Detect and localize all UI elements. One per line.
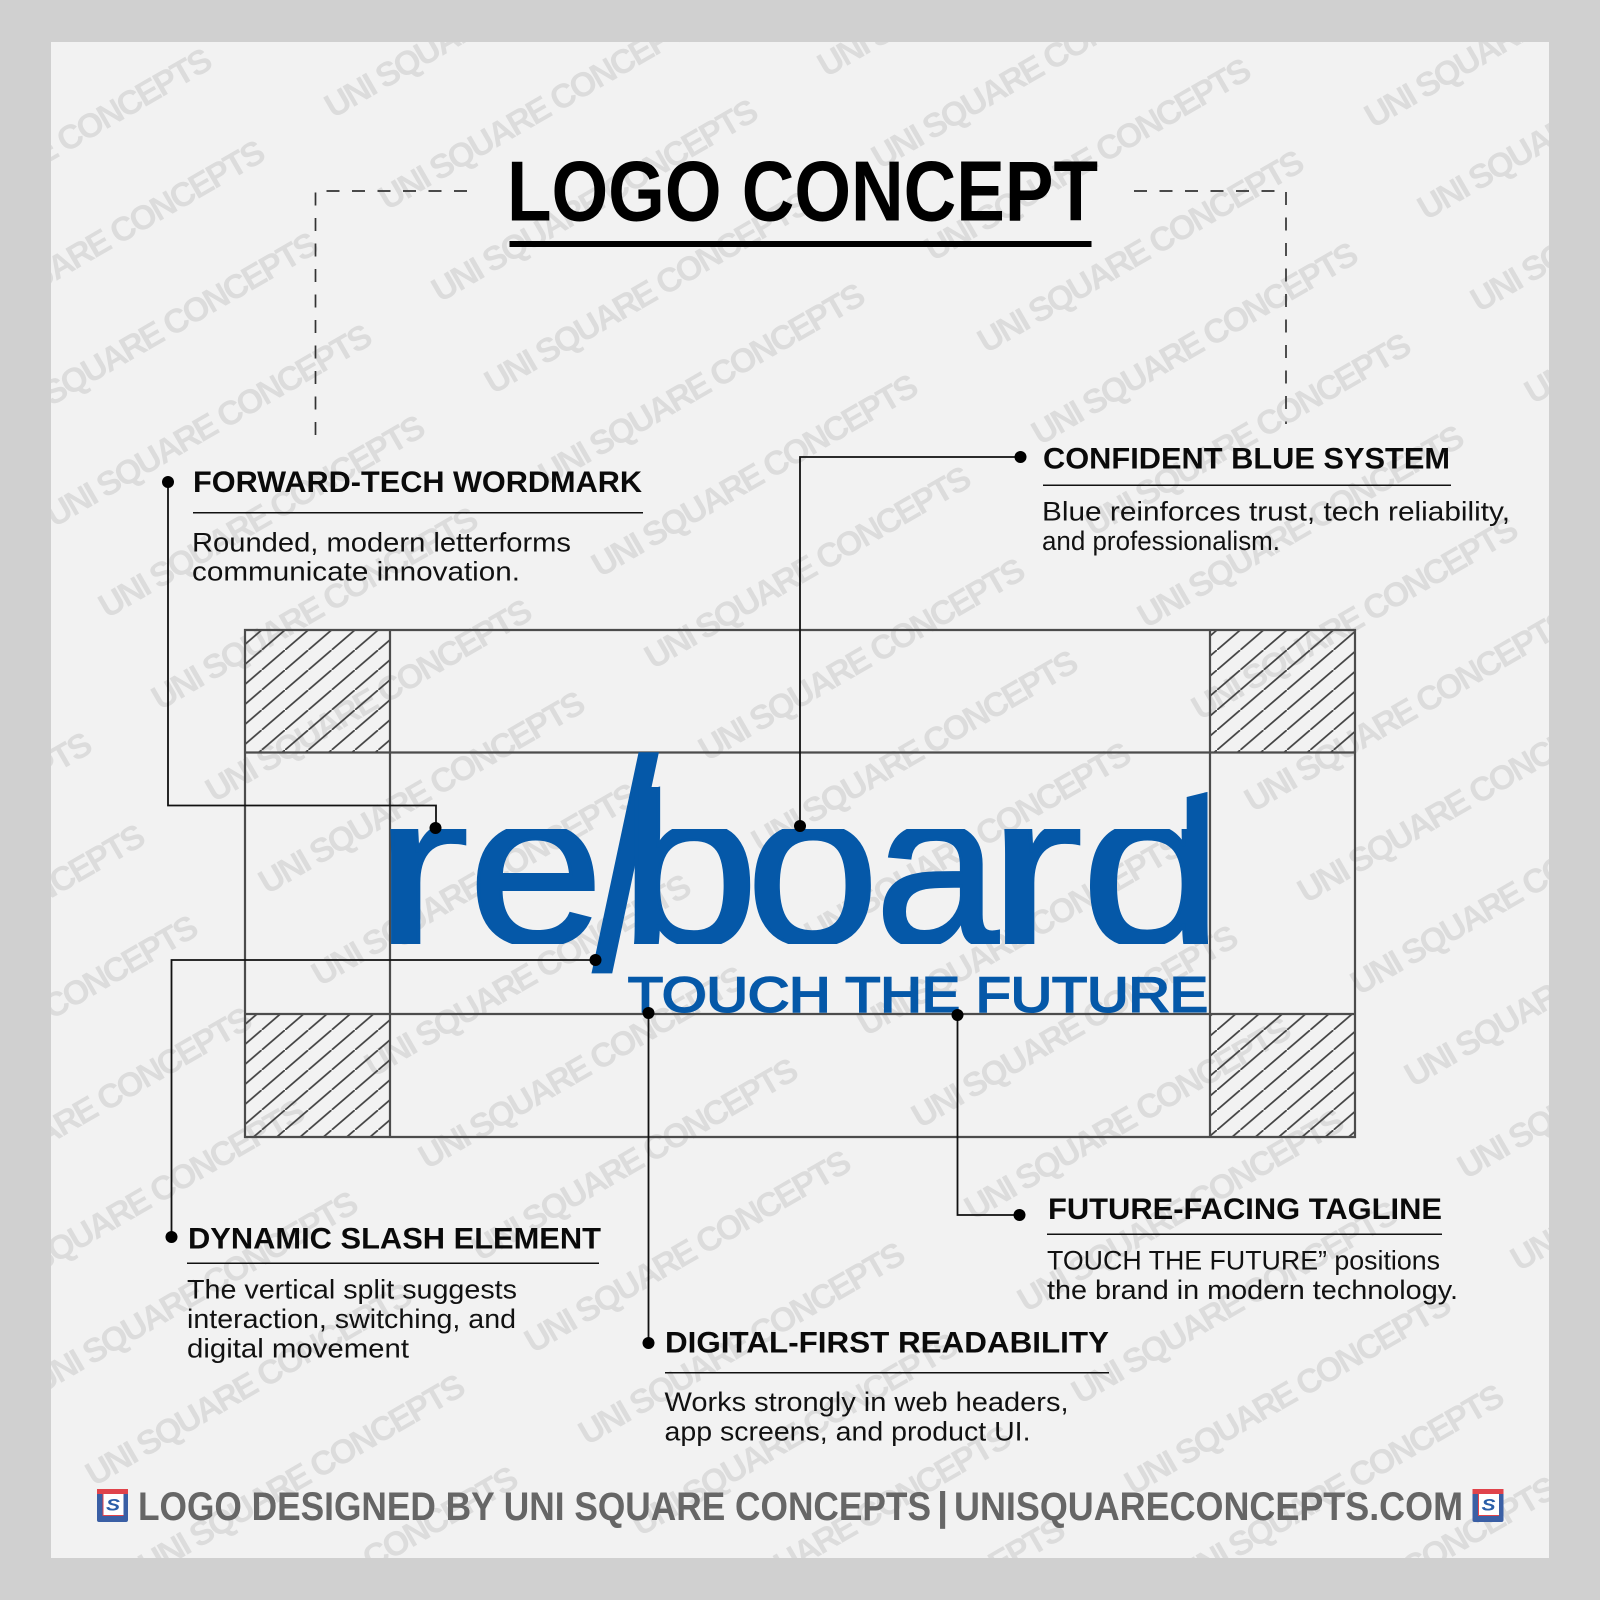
watermark pattern: UNI SQUARE CONCEPTS bbox=[1025, 235, 1364, 453]
heading: CONFIDENT BLUE SYSTEM bbox=[1043, 442, 1450, 476]
watermark pattern: UNI SQUARE CONCEPTS bbox=[425, 92, 764, 310]
logo: re/board wordmark: r bbox=[987, 743, 1083, 991]
watermark pattern: UNI SQUARE CONCEPTS bbox=[1238, 602, 1577, 820]
icon: footer logo left bbox=[97, 1489, 128, 1522]
watermark pattern: UNI SQUARE CONCEPTS bbox=[145, 500, 484, 718]
connector bbox=[166, 954, 602, 1243]
watermark pattern: UNI SQUARE CONCEPTS bbox=[79, 1276, 418, 1494]
logo: re/board wordmark: b bbox=[620, 744, 759, 992]
watermark pattern: UNI SQUARE CONCEPTS bbox=[39, 317, 378, 535]
watermark pattern: UNI SQUARE CONCEPTS bbox=[465, 1051, 804, 1269]
watermark pattern: UNI SQUARE CONCEPTS bbox=[25, 1184, 364, 1402]
watermark pattern: UNI SQUARE CONCEPTS bbox=[1011, 1102, 1350, 1320]
watermark pattern: UNI SQUARE CONCEPTS bbox=[92, 408, 431, 626]
watermark pattern: UNI SQUARE CONCEPTS bbox=[1065, 1194, 1404, 1412]
icon: footer logo left: S bbox=[106, 1496, 121, 1514]
body text: and professionalism. bbox=[1042, 526, 1280, 556]
watermark pattern: UNI SQUARE CONCEPTS bbox=[798, 735, 1137, 953]
watermark pattern: UNI SQUARE CONCEPTS bbox=[905, 918, 1244, 1136]
connector bbox=[642, 1007, 654, 1349]
watermark pattern: UNI SQUARE CONCEPTS bbox=[532, 276, 871, 494]
heading: FUTURE-FACING TAGLINE bbox=[1048, 1193, 1442, 1226]
callout: future-facing tagline bbox=[952, 1009, 1458, 1305]
logo tagline: TOUCH THE FUTURE bbox=[628, 968, 1208, 1022]
callout: forward-tech wordmark bbox=[162, 466, 643, 834]
heading: FORWARD-TECH WORDMARK bbox=[193, 466, 642, 499]
watermark pattern: UNI SQUARE CONCEPTS bbox=[958, 1010, 1297, 1228]
rule bbox=[665, 1372, 1109, 1374]
body text bbox=[664, 1387, 1068, 1446]
watermark pattern: UNI SQUARE CONCEPTS bbox=[252, 684, 591, 902]
clear-space grid bbox=[245, 630, 1355, 1137]
body text: Rounded, modern letterforms bbox=[192, 528, 571, 558]
watermark pattern: UNI SQUARE CONCEPTS bbox=[478, 184, 817, 402]
connector bbox=[794, 451, 1026, 832]
watermark pattern: UNI SQUARE CONCEPTS bbox=[518, 1143, 857, 1361]
watermark pattern: UNI SQUARE CONCEPTS bbox=[1171, 1377, 1510, 1595]
watermark pattern: CONCEPTS bbox=[356, 1459, 524, 1578]
body text bbox=[192, 528, 571, 586]
watermark pattern: UNI SQUARE CONCEPTS bbox=[372, 0, 711, 218]
body text bbox=[187, 1274, 517, 1364]
rule bbox=[1043, 484, 1451, 486]
body text: app screens, and product UI. bbox=[664, 1416, 1030, 1446]
dashed bracket right bbox=[1134, 191, 1286, 424]
heading: DYNAMIC SLASH ELEMENT bbox=[188, 1222, 601, 1256]
watermark pattern: UNI SQUARE CONCEPTS bbox=[918, 51, 1257, 269]
watermark pattern: UNI SQUARE CONCEPTS bbox=[1118, 1285, 1457, 1503]
footer credit bbox=[138, 1485, 1463, 1529]
connector bbox=[162, 476, 442, 834]
body text: Blue reinforces trust, tech reliability, bbox=[1042, 496, 1510, 526]
logo: re/board wordmark: e bbox=[468, 744, 604, 992]
watermark pattern: UNI SQUARE CONCEPTS bbox=[412, 959, 751, 1177]
logo: re/board wordmark bbox=[373, 701, 1223, 1033]
icon: footer logo right: S bbox=[1482, 1496, 1496, 1514]
watermark pattern: UNI SQUARE CONCEPTS bbox=[305, 776, 644, 994]
rule bbox=[187, 1262, 599, 1264]
callout: digital-first readability bbox=[642, 1007, 1109, 1446]
body text: communicate innovation. bbox=[192, 556, 520, 586]
watermark pattern: UNI SQUARE CONCEPTS bbox=[1131, 418, 1470, 636]
title: LOGO CONCEPT bbox=[507, 144, 1098, 240]
watermark pattern: UNI SQUARE CONCEPTS bbox=[971, 143, 1310, 361]
heading: DIGITAL-FIRST READABILITY bbox=[665, 1326, 1109, 1360]
body text: The vertical split suggests bbox=[187, 1274, 517, 1304]
logo: re/board wordmark: o bbox=[746, 743, 879, 991]
watermark pattern: UARE CONCEPTS bbox=[768, 1418, 1017, 1584]
rule bbox=[1047, 1234, 1442, 1235]
footer credit: | bbox=[937, 1485, 948, 1529]
icon: footer logo right bbox=[1472, 1489, 1504, 1522]
watermark pattern: UNI SQUARE CONCEPTS bbox=[199, 592, 538, 810]
footer credit: UNISQUARECONCEPTS.COM bbox=[954, 1485, 1463, 1529]
logo: re/board wordmark: r bbox=[373, 743, 469, 991]
watermark pattern: UNI SQUARE CONCEPTS bbox=[572, 1235, 911, 1453]
body text: Works strongly in web headers, bbox=[664, 1387, 1068, 1417]
footer credit: LOGO DESIGNED BY UNI SQUARE CONCEPTS bbox=[138, 1485, 931, 1529]
dashed bracket left bbox=[316, 191, 467, 437]
callout: confident blue system bbox=[794, 442, 1510, 832]
connector bbox=[952, 1009, 1026, 1221]
watermark pattern: UNI SQUARE CONCEPTS bbox=[358, 867, 697, 1085]
body text: the brand in modern technology. bbox=[1047, 1275, 1458, 1305]
watermark pattern: UNI SQUARE CONCEPTS bbox=[1185, 510, 1524, 728]
title underline bbox=[510, 241, 1092, 247]
body text: interaction, switching, and bbox=[187, 1304, 516, 1334]
body text bbox=[1047, 1246, 1458, 1305]
body text bbox=[1042, 496, 1510, 556]
watermark pattern: UNI SQUARE CONCEPTS bbox=[1078, 326, 1417, 544]
watermark pattern: UNI SQUARE CONCEPTS bbox=[585, 367, 924, 585]
watermark pattern: UNI SQUARE CONCEPTS bbox=[745, 643, 1084, 861]
watermark pattern: UNI SQUARE CONCEPTS bbox=[625, 1326, 964, 1544]
logo: re/board wordmark: a bbox=[875, 744, 999, 992]
logo: re/board wordmark: d bbox=[1081, 743, 1223, 991]
watermark pattern: UNI SQUARE CONCEPTS bbox=[132, 1367, 471, 1585]
watermark pattern: CONCEPTS bbox=[1395, 1469, 1563, 1588]
watermark pattern: UNI SQUARE CONCEPTS bbox=[851, 826, 1190, 1044]
logo: re/board wordmark: / bbox=[593, 701, 658, 1033]
watermark pattern: UNI SQUARE CONCEPTS bbox=[638, 459, 977, 677]
callout: dynamic slash element bbox=[166, 954, 602, 1364]
body text: TOUCH THE FUTURE” positions bbox=[1047, 1246, 1440, 1276]
watermark pattern: EPTS bbox=[982, 1510, 1071, 1584]
body text: digital movement bbox=[187, 1334, 410, 1364]
watermark pattern: UNI SQUARE CONCEPTS bbox=[692, 551, 1031, 769]
rule bbox=[193, 512, 643, 514]
